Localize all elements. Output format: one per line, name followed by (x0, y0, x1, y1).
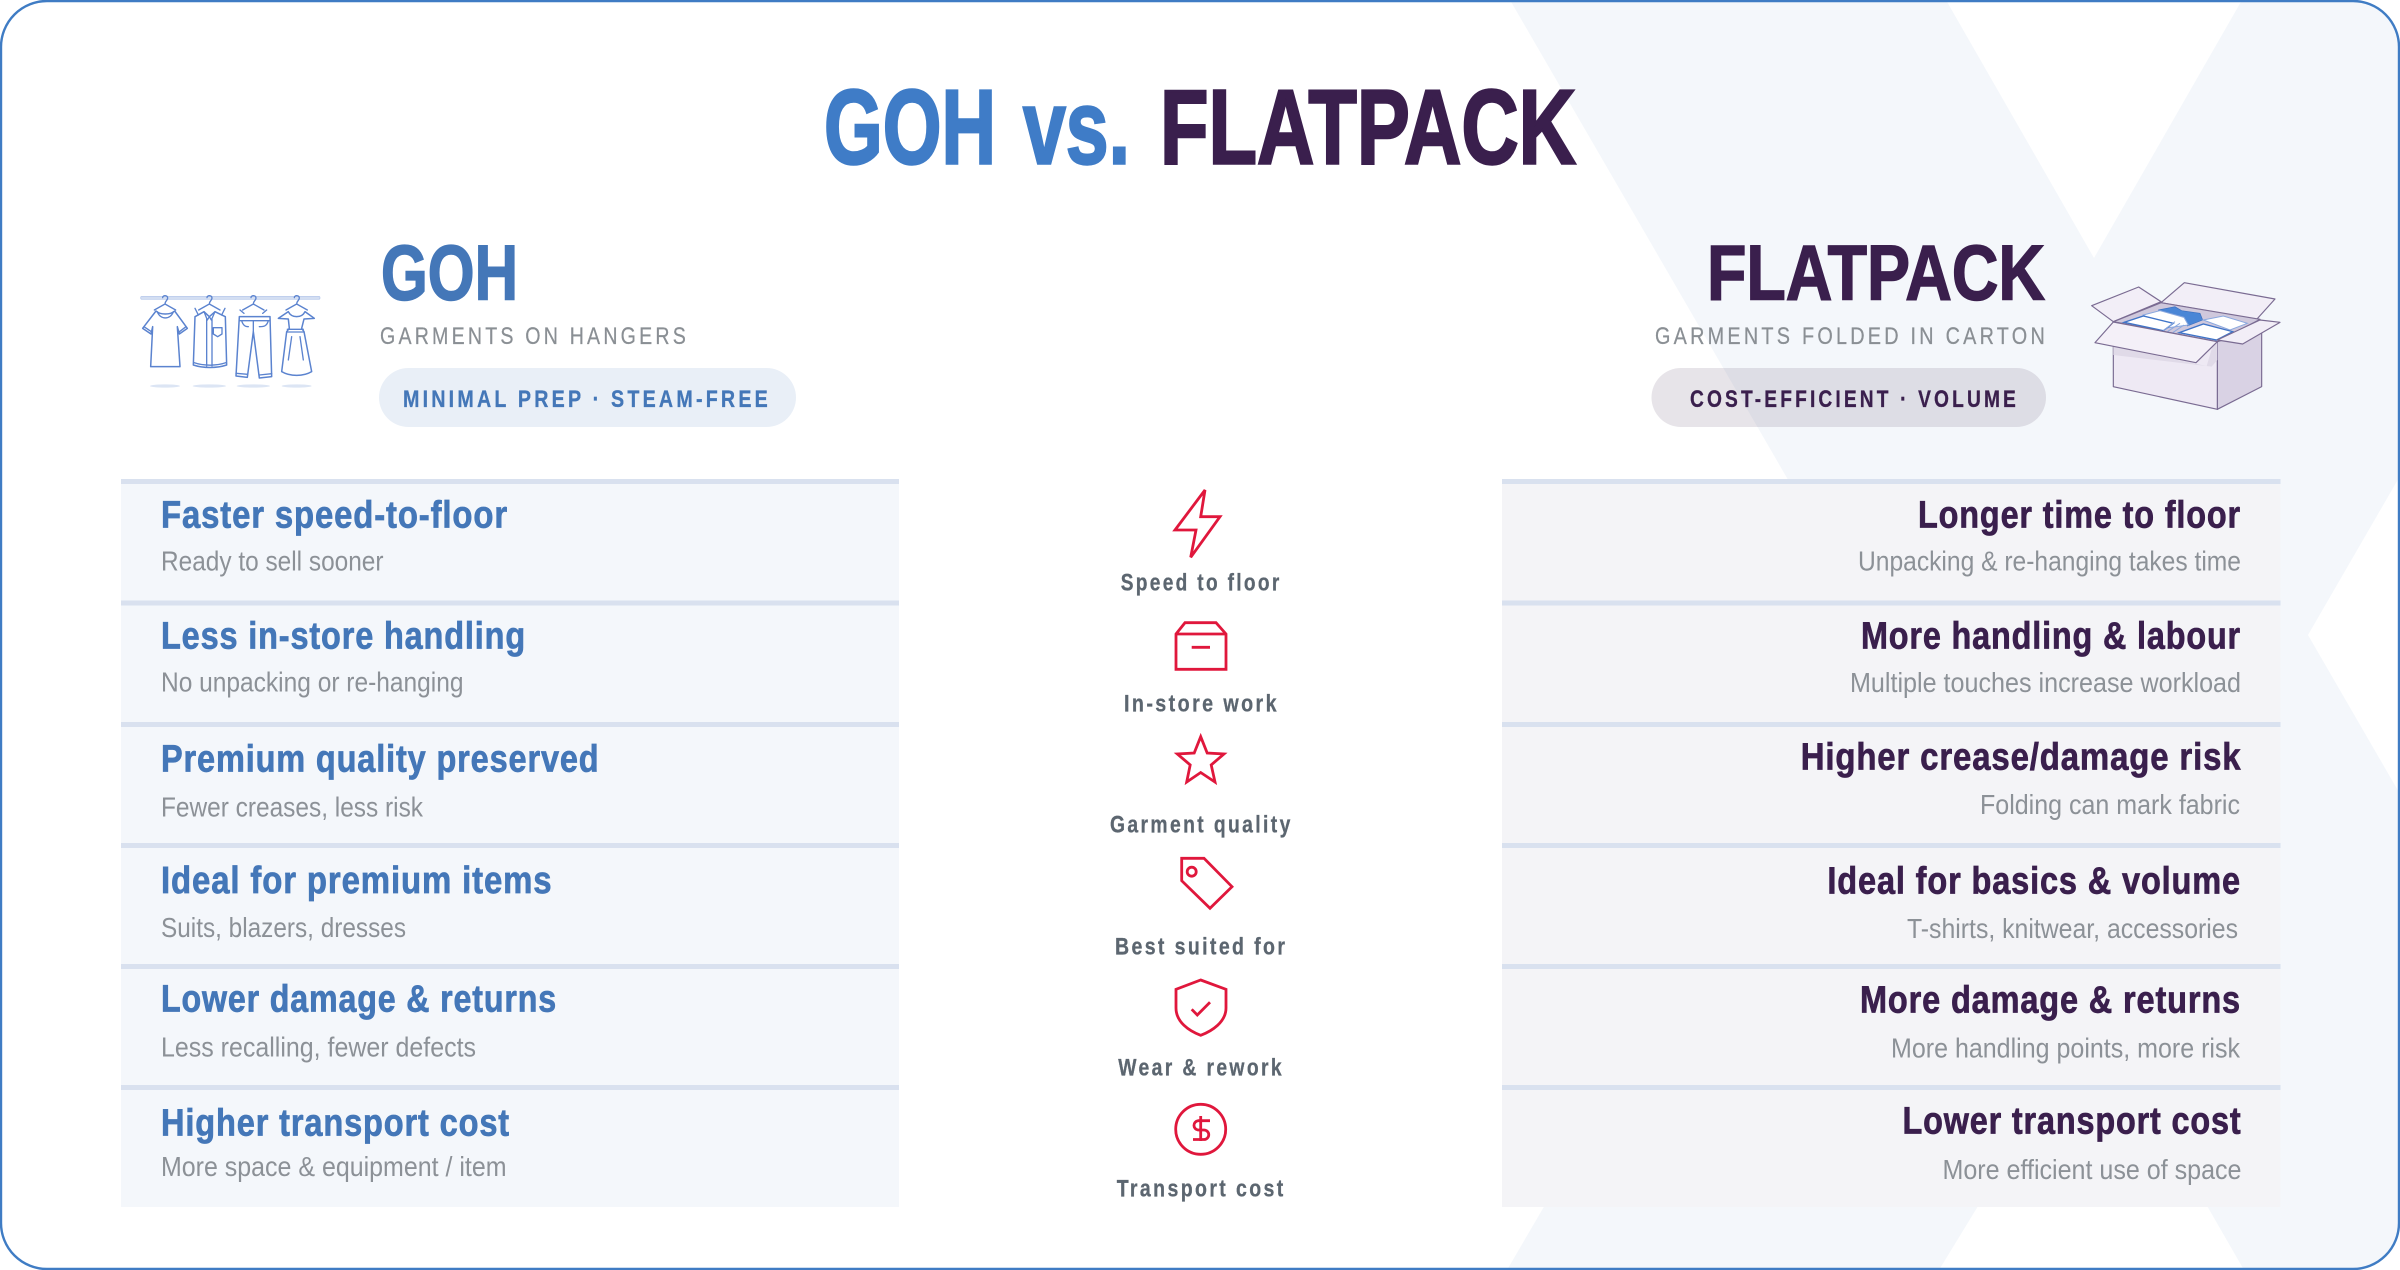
row: basics: Ideal for basics & volume (1827, 861, 2241, 903)
panel: FLATPACK comparison column (1502, 479, 2280, 1207)
row: in-store handling: Less in-store handling (161, 616, 526, 658)
title: FLATPACK (1160, 68, 1576, 186)
row: speed to floor: Ready to sell sooner (161, 546, 384, 577)
heading: GOH (380, 228, 689, 350)
icon: dollar coin (1176, 1104, 1226, 1154)
label: speed to floor: Speed to floor (1121, 570, 1282, 597)
row: damage (121, 964, 899, 1085)
badge: minimal prep: MINIMAL PREP · STEAM-FREE (403, 386, 771, 413)
row: speed to floor: Faster speed-to-floor (161, 495, 508, 537)
row: transport: Higher transport cost (161, 1102, 510, 1144)
icon: price tag (1182, 858, 1232, 908)
label: transport cost: Transport cost (1117, 1176, 1286, 1203)
row: basics: T-shirts, knitwear, accessories (1907, 913, 2238, 944)
label: best suited for: Best suited for (1115, 933, 1287, 960)
panel: card background (1508, 2, 2398, 1268)
label: wear and rework: Wear & rework (1118, 1055, 1284, 1082)
badge: cost-efficient: COST-EFFICIENT · VOLUME (1690, 386, 2019, 413)
heading: FLATPACK (1655, 228, 2048, 350)
title: GOH (824, 68, 996, 186)
heading: GOH: GOH (381, 228, 518, 316)
title: vs. (1023, 68, 1130, 186)
row: more damage (1502, 964, 2280, 1085)
heading: GOH: GARMENTS ON HANGERS (380, 323, 689, 350)
row: in-store handling (121, 600, 899, 722)
row: transport: More space & equipment / item (161, 1151, 506, 1182)
row: in-store handling: No unpacking or re-hanging (161, 667, 464, 698)
row: time to floor: Longer time to floor (1918, 494, 2241, 536)
badge: cost-efficient (1652, 368, 2046, 427)
panel: centre criteria (1110, 490, 1293, 1203)
row: best suited (121, 843, 899, 964)
row: quality: Fewer creases, less risk (161, 792, 424, 823)
row: crease risk: Folding can mark fabric (1980, 789, 2240, 820)
row: damage: Lower damage & returns (161, 979, 557, 1021)
icon: open carton of folded garments (2092, 283, 2280, 409)
row: basics (1502, 843, 2280, 964)
row: best suited: Ideal for premium items (161, 860, 552, 902)
row: handling: Multiple touches increase workload (1850, 667, 2241, 698)
row: crease risk: Higher crease/damage risk (1801, 737, 2242, 779)
heading: FLATPACK: GARMENTS FOLDED IN CARTON (1655, 323, 2048, 350)
row: best suited: Suits, blazers, dresses (161, 912, 406, 943)
row: more damage: More handling points, more risk (1891, 1033, 2241, 1064)
row: more damage: More damage & returns (1860, 979, 2241, 1021)
badge: minimal prep (379, 368, 796, 427)
row: damage: Less recalling, fewer defects (161, 1032, 476, 1063)
row: handling (1502, 600, 2280, 722)
row: time to floor (1502, 479, 2280, 600)
title (824, 68, 1576, 186)
row: speed to floor (121, 479, 899, 600)
row: quality (121, 722, 899, 843)
row: lower transport (1502, 1085, 2280, 1207)
icon: garments on a rail (141, 296, 320, 388)
row: lower transport: Lower transport cost (1902, 1101, 2242, 1143)
row: lower transport: More efficient use of space (1942, 1154, 2242, 1185)
row: quality: Premium quality preserved (161, 739, 600, 781)
row: crease risk (1502, 722, 2280, 843)
row: transport (121, 1085, 899, 1207)
icon: star (1177, 737, 1224, 782)
label: in-store work: In-store work (1124, 691, 1279, 718)
icon: shield with check (1176, 980, 1226, 1035)
panel: GOH comparison column (121, 479, 899, 1207)
icon: lightning bolt (1175, 490, 1220, 557)
row: time to floor: Unpacking & re-hanging takes time (1858, 546, 2241, 577)
heading: FLATPACK: FLATPACK (1707, 228, 2045, 316)
row: handling: More handling & labour (1861, 616, 2241, 658)
icon: box (1176, 623, 1226, 669)
label: garment quality: Garment quality (1110, 812, 1293, 839)
